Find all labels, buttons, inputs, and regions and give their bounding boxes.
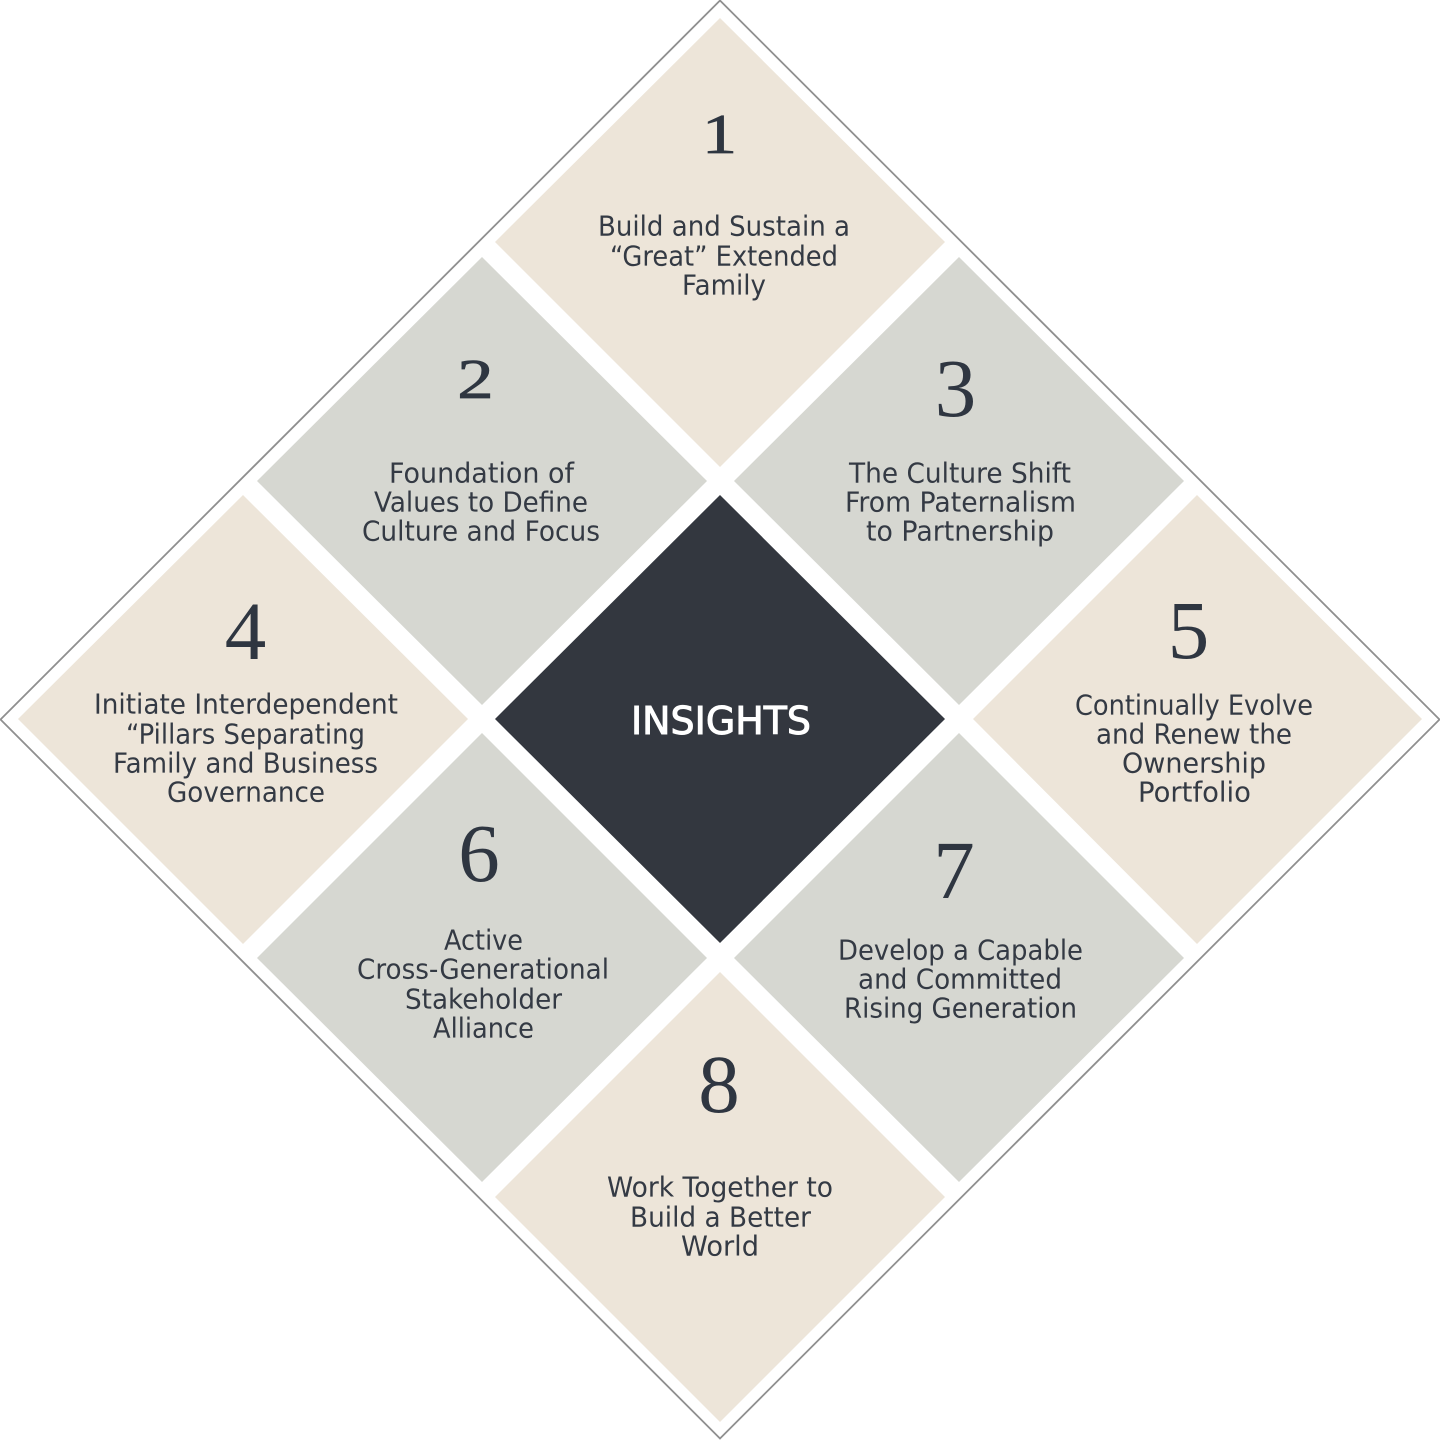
number 2: 2	[457, 349, 494, 411]
text 4	[94, 688, 398, 808]
number 3: 3	[935, 342, 976, 434]
text 7: and Committed	[858, 964, 1062, 996]
center panel: Insights	[495, 495, 945, 943]
text 7: Develop a Capable	[838, 934, 1083, 966]
center label: INSIGHTS	[631, 699, 811, 743]
text 4: Initiate Interdependent	[94, 688, 398, 720]
text 6	[357, 924, 609, 1044]
text 5: Portfolio	[1138, 776, 1251, 808]
text 3: The Culture Shift	[848, 458, 1071, 490]
panel 1: Build and Sustain	[495, 18, 945, 467]
number 6: 6	[458, 807, 500, 899]
text 6: Alliance	[433, 1012, 534, 1044]
text 8: Build a Better	[630, 1202, 812, 1234]
panel 5: Continually Evolve	[973, 495, 1422, 944]
text 3	[845, 458, 1076, 548]
text 1: Family	[682, 270, 766, 302]
text 6: Cross-Generational	[357, 954, 609, 986]
text 8: World	[681, 1230, 759, 1262]
text 5	[1075, 690, 1313, 808]
panel 8: Work Together	[495, 972, 945, 1422]
number 4: 4	[225, 585, 266, 677]
panel 2: Foundation of Values	[257, 257, 707, 705]
number 1: 1	[702, 104, 737, 165]
panel 3: The Culture Shift	[734, 257, 1184, 705]
text 5: Continually Evolve	[1075, 690, 1313, 722]
text 8	[607, 1172, 833, 1262]
text 4: “Pillars Separating	[126, 718, 365, 750]
text 8: Work Together to	[607, 1172, 833, 1204]
number 7: 7	[933, 824, 975, 916]
text 1: “Great” Extended	[610, 240, 838, 272]
text 2	[362, 458, 600, 548]
text 6: Active	[444, 924, 523, 956]
text 1: Build and Sustain a	[598, 210, 850, 242]
number 5: 5	[1168, 584, 1209, 676]
text 5: and Renew the	[1096, 718, 1292, 750]
text 5: Ownership	[1122, 748, 1266, 780]
text 1	[598, 210, 850, 302]
text 3: to Partnership	[866, 516, 1054, 548]
text 6: Stakeholder	[405, 984, 563, 1016]
text 4: Family and Business	[113, 748, 378, 780]
text 2: Foundation of	[389, 458, 575, 490]
text 7: Rising Generation	[844, 992, 1077, 1024]
text 2: Culture and Focus	[362, 516, 600, 548]
number 8: 8	[698, 1038, 740, 1130]
text 4: Governance	[167, 776, 325, 808]
text 2: Values to Define	[374, 486, 588, 518]
panel 7: Develop a Capable	[734, 733, 1184, 1182]
text 7	[838, 934, 1083, 1024]
panel 6: Active Cross-Generational	[257, 733, 707, 1182]
panel 4: Initiate Interdependent	[18, 495, 468, 944]
text 3: From Paternalism	[845, 486, 1076, 518]
